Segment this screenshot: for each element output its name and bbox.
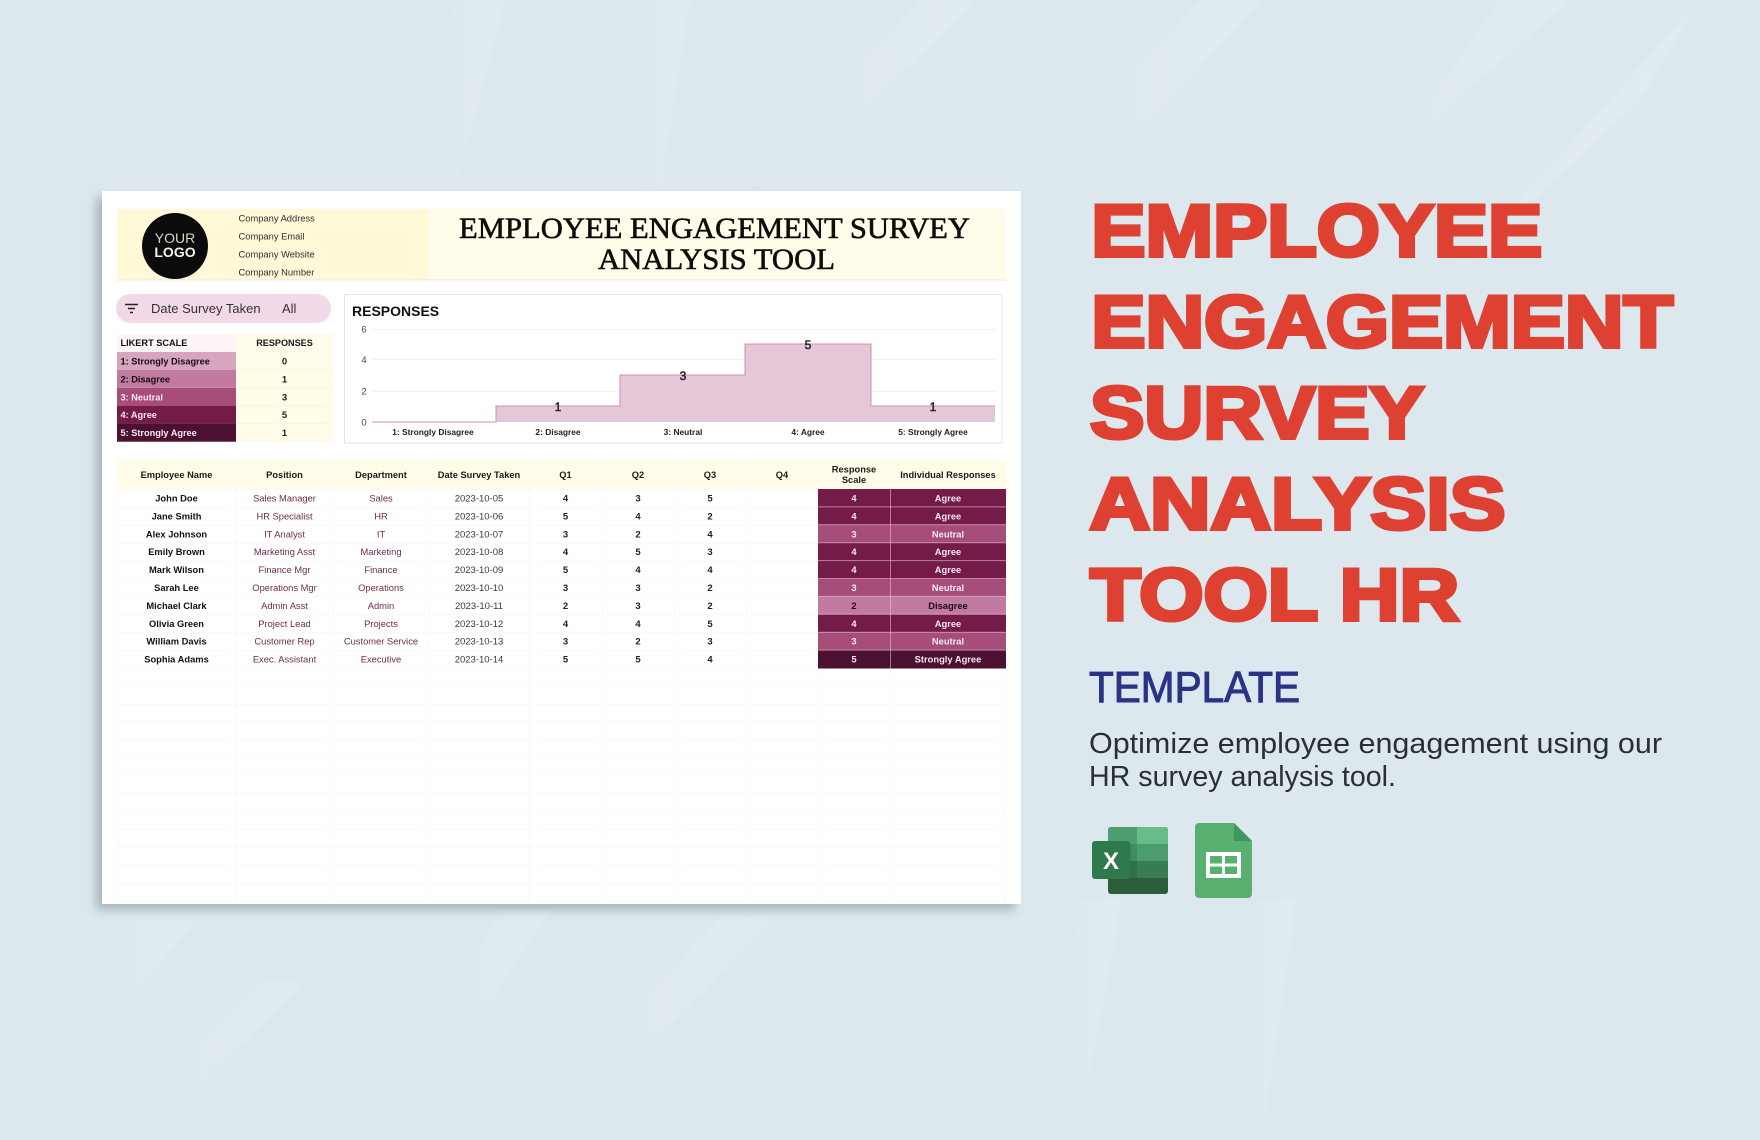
company details: Company Website	[238, 250, 315, 260]
category labels: 5: Strongly Agree	[898, 427, 968, 437]
table header: Position	[266, 470, 303, 480]
category labels: 1: Strongly Disagree	[392, 427, 474, 437]
row: Alex Johnson: 3	[851, 529, 857, 539]
main heading	[1090, 191, 1673, 636]
category labels: 4: Agree	[791, 427, 825, 437]
row: Sophia Adams: 2023-10-14	[455, 655, 503, 666]
row: Sarah Lee: Operations Mgr	[252, 583, 317, 593]
row: Mark Wilson: 4	[707, 565, 713, 576]
table header: Employee Name	[141, 470, 212, 480]
category labels: 3: Neutral	[664, 427, 702, 437]
row: Sophia Adams	[144, 650, 1006, 668]
survey data table	[117, 459, 1006, 904]
y axis labels	[361, 324, 367, 428]
row: Emily Brown: Emily Brown	[148, 547, 205, 557]
row: Sophia Adams: 4	[707, 655, 713, 666]
company details: Company Email	[238, 232, 304, 242]
row: Sarah Lee: 3	[851, 583, 857, 593]
icon: excel	[1092, 827, 1168, 894]
table header: Date Survey Taken	[438, 470, 521, 480]
row: Michael Clark: Disagree	[928, 601, 968, 611]
row: Sarah Lee: Neutral	[932, 583, 964, 593]
row: Sophia Adams: Exec. Assistant	[253, 655, 317, 665]
likert row 5: 1	[282, 428, 288, 439]
logo badge: YOUR	[155, 230, 195, 246]
row: Alex Johnson: Alex Johnson	[146, 529, 207, 539]
likert row 3: 3: Neutral	[120, 392, 163, 402]
row: Olivia Green: 5	[707, 619, 713, 630]
row: Jane Smith: 2	[707, 511, 713, 522]
row: Jane Smith: HR	[374, 511, 388, 521]
category labels	[392, 427, 968, 437]
data labels: 1	[555, 400, 562, 414]
row: Michael Clark: 2	[851, 601, 857, 611]
row: William Davis: 2	[635, 637, 641, 648]
y axis labels: 2	[361, 386, 367, 398]
table header: Department	[355, 470, 407, 480]
row: Michael Clark: 2023-10-11	[455, 601, 503, 612]
row: Mark Wilson: Finance Mgr	[259, 565, 310, 575]
table header: Scale	[842, 475, 866, 485]
row: Emily Brown: 5	[635, 547, 641, 558]
table header: Q1	[559, 470, 572, 480]
sheet title: ANALYSIS TOOL	[598, 243, 835, 276]
table header	[117, 459, 1006, 489]
main heading: ENGAGEMENT	[1091, 282, 1673, 363]
likert row 1: 1: Strongly Disagree	[120, 356, 210, 366]
y axis labels: 6	[361, 324, 367, 336]
row: Sarah Lee: 3	[635, 583, 641, 594]
row: Sarah Lee: 3	[563, 583, 568, 594]
row: Olivia Green: Projects	[364, 619, 398, 629]
likert row 2	[117, 370, 288, 388]
likert row 1	[117, 352, 287, 370]
likert row 2: 1	[282, 374, 288, 385]
row: Jane Smith: Jane Smith	[152, 511, 202, 521]
category labels: 2: Disagree	[535, 427, 581, 437]
row: Emily Brown: Marketing Asst	[254, 547, 316, 557]
row: William Davis: Customer Rep	[254, 637, 315, 647]
row: William Davis: 3	[851, 637, 857, 647]
row: Mark Wilson: 4	[635, 565, 641, 576]
likert row 4	[117, 406, 288, 424]
row: Sophia Adams: 5	[563, 655, 569, 666]
row: Sarah Lee: Sarah Lee	[154, 583, 199, 593]
row: Olivia Green: Olivia Green	[149, 619, 204, 629]
row: Mark Wilson: 4	[851, 565, 857, 575]
row: Sarah Lee: 2023-10-10	[455, 583, 503, 594]
likert scale table: RESPONSES	[256, 338, 313, 348]
table header: Q3	[704, 470, 716, 480]
row: John Doe: 2023-10-05	[455, 494, 503, 504]
row: Sarah Lee: 2	[707, 583, 713, 594]
row: Olivia Green: 4	[851, 619, 857, 629]
row: John Doe: 4	[563, 494, 569, 504]
filter pill	[116, 294, 331, 323]
chart panel: responses: RESPONSES	[352, 303, 439, 319]
row: Jane Smith: Agree	[935, 511, 961, 521]
icon: google sheets	[1195, 823, 1252, 898]
row: Emily Brown: 2023-10-08	[455, 547, 503, 558]
row: Emily Brown	[148, 543, 1006, 561]
company details	[238, 214, 315, 278]
main heading: TOOL HR	[1090, 555, 1459, 636]
table header: Q2	[632, 470, 644, 480]
table header: Response	[832, 464, 876, 474]
row: Michael Clark: 3	[635, 601, 641, 612]
sheet header band	[117, 209, 1006, 280]
company details: Company Address	[238, 214, 315, 224]
row: Sophia Adams: Strongly Agree	[915, 655, 981, 665]
row: Sophia Adams: 5	[635, 655, 641, 666]
description text: Optimize employee engagement using our	[1089, 728, 1662, 760]
row: Michael Clark: Admin	[368, 601, 394, 611]
row: Mark Wilson: 2023-10-09	[455, 565, 503, 576]
row: John Doe: 3	[635, 494, 641, 504]
row: Alex Johnson: 2023-10-07	[455, 529, 503, 540]
row: Mark Wilson	[149, 561, 1006, 578]
data labels: 3	[680, 369, 687, 383]
row: Mark Wilson: 5	[563, 565, 569, 576]
row: William Davis: 3	[563, 637, 568, 648]
sheet title: EMPLOYEE ENGAGEMENT SURVEY	[459, 212, 970, 245]
likert row 5: 5: Strongly Agree	[120, 428, 197, 438]
likert row 2: 2: Disagree	[120, 374, 170, 384]
row: John Doe	[155, 489, 1006, 507]
sheet title	[459, 212, 970, 276]
description text	[1089, 728, 1662, 793]
row: Emily Brown: 4	[851, 547, 857, 557]
row: Jane Smith	[152, 507, 1006, 525]
row: Sophia Adams: 5	[851, 655, 857, 665]
row: Mark Wilson: Agree	[935, 565, 961, 575]
row: Emily Brown: Marketing	[360, 547, 402, 557]
row: John Doe: Sales	[369, 494, 393, 504]
subheading: template: TEMPLATE	[1089, 664, 1300, 712]
row: Alex Johnson: IT Analyst	[264, 529, 305, 539]
row: Jane Smith: 4	[851, 511, 857, 521]
row: Michael Clark: Michael Clark	[146, 601, 207, 611]
main heading: ANALYSIS	[1090, 464, 1506, 545]
row: Olivia Green	[149, 614, 1006, 632]
row: Sophia Adams: Sophia Adams	[144, 655, 209, 665]
row: Alex Johnson: 2	[635, 529, 641, 540]
likert row 5	[117, 424, 288, 442]
likert scale table: LIKERT SCALE	[120, 338, 187, 348]
filter pill: All	[282, 301, 297, 316]
spreadsheet card	[96, 191, 1021, 910]
row: Michael Clark: 2	[707, 601, 713, 612]
data labels	[555, 338, 937, 414]
row: Olivia Green: 4	[563, 619, 569, 630]
row: Jane Smith: HR Specialist	[256, 511, 313, 521]
likert row 3	[117, 388, 287, 406]
row: John Doe: 5	[707, 494, 713, 504]
row: William Davis	[146, 632, 1006, 650]
stepped area series	[372, 344, 995, 422]
description text: HR survey analysis tool.	[1089, 761, 1396, 793]
likert row 1: 0	[282, 356, 287, 368]
row: Sophia Adams: Executive	[361, 655, 401, 665]
data labels: 5	[805, 338, 812, 352]
row: Olivia Green: Agree	[935, 619, 961, 629]
row: John Doe: John Doe	[155, 494, 198, 504]
row: Alex Johnson	[146, 525, 1006, 543]
company details: Company Number	[238, 268, 314, 278]
row: Mark Wilson: Finance	[364, 565, 398, 575]
row: Michael Clark	[146, 596, 1006, 614]
row: Michael Clark: Admin Asst	[261, 601, 308, 611]
row: Alex Johnson: Neutral	[932, 529, 964, 539]
likert scale table	[117, 334, 333, 442]
main heading: EMPLOYEE	[1091, 191, 1542, 272]
icon: excel: X	[1103, 848, 1119, 875]
icon: filter	[125, 304, 138, 312]
row: William Davis: William Davis	[146, 637, 207, 647]
likert row 4: 5	[282, 410, 288, 421]
logo badge	[142, 213, 208, 279]
row: Michael Clark: 2	[563, 601, 568, 612]
row: Emily Brown: 4	[563, 547, 569, 558]
row: Olivia Green: 4	[635, 619, 641, 630]
row: Jane Smith: 4	[635, 511, 641, 522]
row: Alex Johnson: 3	[563, 529, 568, 540]
row: John Doe: Agree	[935, 494, 961, 504]
row: Jane Smith: 5	[563, 511, 569, 522]
likert row 3: 3	[282, 392, 287, 403]
row: William Davis: Customer Service	[344, 637, 418, 647]
row: John Doe: Sales Manager	[253, 494, 316, 504]
table header: Individual Responses	[900, 470, 996, 480]
row: Alex Johnson: 4	[707, 529, 713, 540]
table header: Q4	[776, 470, 789, 480]
main heading: SURVEY	[1090, 373, 1424, 454]
row: Olivia Green: Project Lead	[258, 619, 311, 629]
y axis labels: 0	[361, 418, 367, 428]
row: William Davis: Neutral	[932, 637, 964, 647]
row: Alex Johnson: IT	[377, 529, 385, 539]
likert row 4: 4: Agree	[120, 410, 157, 420]
row: William Davis: 3	[707, 637, 713, 648]
row: Sarah Lee	[154, 578, 1006, 596]
filter pill: Date Survey Taken	[151, 301, 261, 316]
row: Sarah Lee: Operations	[358, 583, 404, 593]
row: Mark Wilson: Mark Wilson	[149, 565, 204, 575]
data labels: 1	[930, 400, 937, 414]
chart panel: responses	[344, 294, 1002, 443]
logo badge: LOGO	[154, 244, 196, 260]
row: Olivia Green: 2023-10-12	[455, 619, 503, 630]
row: Emily Brown: Agree	[935, 547, 961, 557]
row: John Doe: 4	[851, 494, 857, 504]
row: Jane Smith: 2023-10-06	[455, 511, 503, 522]
row: William Davis: 2023-10-13	[455, 637, 503, 648]
row: Emily Brown: 3	[707, 547, 713, 558]
y axis labels: 4	[361, 355, 367, 366]
